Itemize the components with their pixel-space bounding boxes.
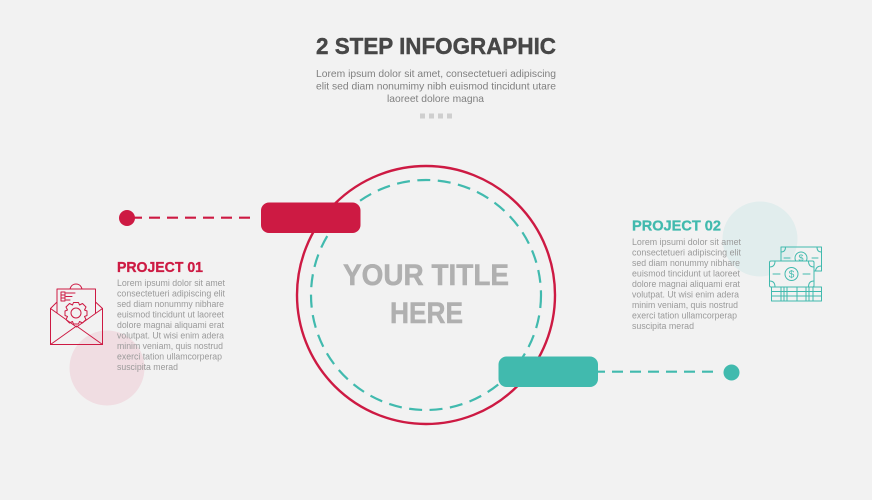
project 01 text: suscipita merad xyxy=(117,362,178,372)
project 01 text: consectetueri adipiscing elit xyxy=(117,288,225,298)
center title: YOUR TITLE xyxy=(343,259,509,292)
decorative teal circle xyxy=(722,202,798,276)
intro text block: Lorem ipsum dolor sit amet, consectetueri adipiscing xyxy=(316,69,556,80)
step 1 pill xyxy=(261,202,360,233)
center title: HERE xyxy=(390,297,463,330)
step 1 connector xyxy=(119,210,250,226)
intro text block: elit sed diam nonumimy nibh euismod tincidunt utare xyxy=(316,82,556,92)
project 02 text: sed diam nonummy nibhare xyxy=(632,258,740,268)
project 02 text: suscipita merad xyxy=(632,321,694,331)
project 02 text: exerci tation ullamcorperap xyxy=(632,310,737,320)
project 01 text: dolore magnai aliquami erat xyxy=(117,320,224,330)
center title xyxy=(343,259,509,330)
project 01 text: exerci tation ullamcorperap xyxy=(117,352,222,362)
project 02 text: Lorem ipsumi dolor sit amet xyxy=(632,237,741,247)
project 01 text: volutpat. Ut wisi enim adera xyxy=(117,330,224,340)
project 02 text xyxy=(632,237,741,331)
central outer ring xyxy=(297,166,555,424)
icon: money bills and stack: $ xyxy=(789,270,795,280)
project 01 heading: PROJECT 01 xyxy=(117,260,203,276)
step 2 pill xyxy=(498,356,598,387)
project 01 text: minim veniam, quis nostrud xyxy=(117,341,223,351)
intro text block xyxy=(316,69,556,105)
project 02 text: consectetueri adipiscing elit xyxy=(632,248,741,258)
icon: envelope with gear document xyxy=(50,284,102,344)
project 02 text: dolore magnai aliquami erat xyxy=(632,279,740,289)
header dots xyxy=(420,114,452,118)
title: 2 STEP INFOGRAPHIC xyxy=(316,33,556,59)
project 02 text: volutpat. Ut wisi enim adera xyxy=(632,290,739,300)
project 01 text: euismod tincidunt ut laoreet xyxy=(117,310,224,320)
project 02 text: minim veniam, quis nostrud xyxy=(632,300,738,310)
central dashed ring xyxy=(311,180,541,410)
project 01 text: Lorem ipsumi dolor sit amet xyxy=(117,278,225,288)
intro text block: laoreet dolore magna xyxy=(387,94,484,105)
icon: money bills and stack xyxy=(770,247,822,301)
project 02 heading: PROJECT 02 xyxy=(632,218,721,234)
icon: money bills and stack: $ xyxy=(798,253,804,263)
project 01 text xyxy=(117,278,225,372)
decorative pink circle xyxy=(70,330,144,406)
project 01 text: sed diam nonummy nibhare xyxy=(117,299,224,309)
step 2 connector xyxy=(598,364,740,380)
project 02 text: euismod tincidunt ut laoreet xyxy=(632,268,740,278)
